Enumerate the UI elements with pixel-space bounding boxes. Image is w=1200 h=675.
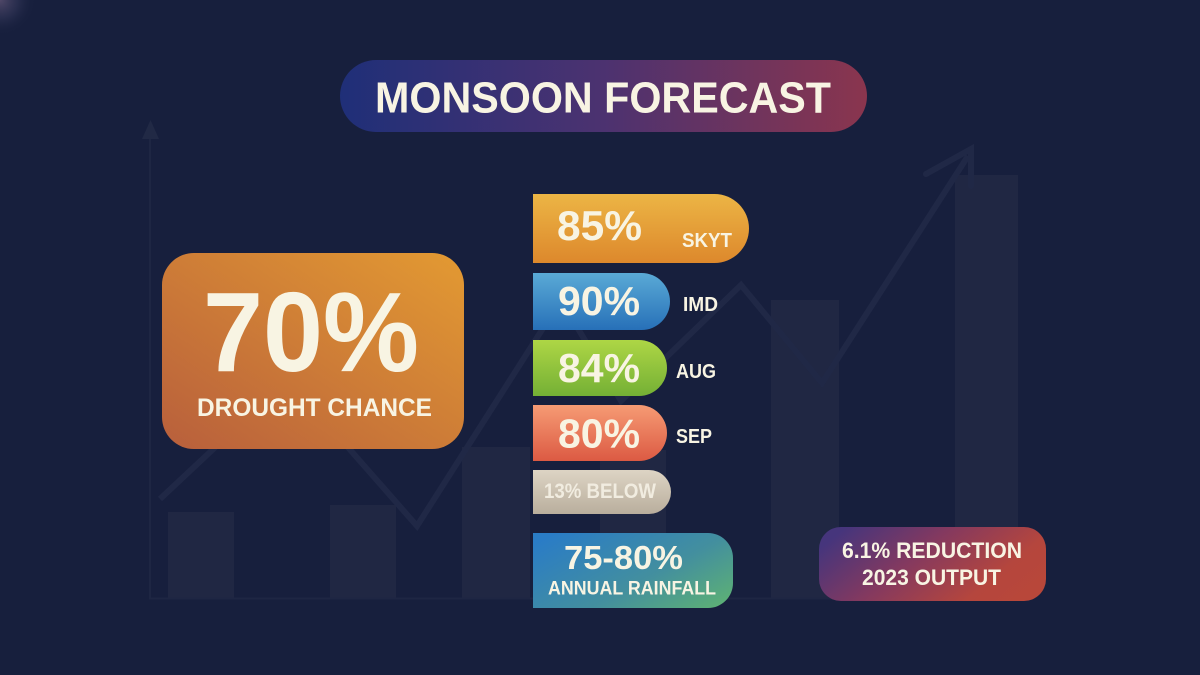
- trend arrow: [160, 149, 971, 526]
- value: 80%: [558, 410, 640, 456]
- panel: drought chance: [162, 253, 464, 449]
- pill: [533, 340, 667, 396]
- label: IMD: [683, 294, 718, 316]
- pill: [819, 527, 1046, 601]
- SKYT forecast: [533, 194, 749, 263]
- IMD forecast: [533, 273, 718, 330]
- pill: [533, 470, 671, 514]
- pill: [533, 533, 733, 608]
- title pill: [340, 60, 867, 132]
- axis arrow: [142, 120, 159, 139]
- pill: [533, 405, 667, 461]
- line 1: 6.1% REDUCTION: [842, 538, 1022, 563]
- value: 84%: [558, 345, 640, 391]
- label: AUG: [676, 361, 716, 383]
- background chart: bars, trend line and axes: [142, 120, 1020, 598]
- big percentage: 70%: [203, 269, 419, 395]
- label: SKYT: [682, 230, 732, 252]
- 13% below: [533, 470, 671, 514]
- axes: [150, 136, 1020, 598]
- value: 85%: [557, 202, 642, 249]
- label: 13% BELOW: [544, 480, 656, 503]
- title text: MONSOON FORECAST: [375, 74, 831, 122]
- pill: [533, 194, 749, 263]
- value: 75-80%: [564, 539, 683, 576]
- card: [162, 253, 464, 449]
- SEP forecast: [533, 405, 712, 461]
- pill: [533, 273, 670, 330]
- annual rainfall: [533, 533, 733, 608]
- AUG forecast: [533, 340, 716, 396]
- corner glow: [0, 0, 36, 36]
- bars: [168, 175, 1018, 598]
- title: [340, 60, 867, 132]
- line 2: 2023 OUTPUT: [862, 565, 1002, 590]
- caption: ANNUAL RAINFALL: [548, 578, 716, 600]
- label: SEP: [676, 426, 712, 448]
- value: 90%: [558, 278, 640, 324]
- 2023 output reduction: [819, 527, 1046, 601]
- caption: DROUGHT CHANCE: [197, 394, 432, 422]
